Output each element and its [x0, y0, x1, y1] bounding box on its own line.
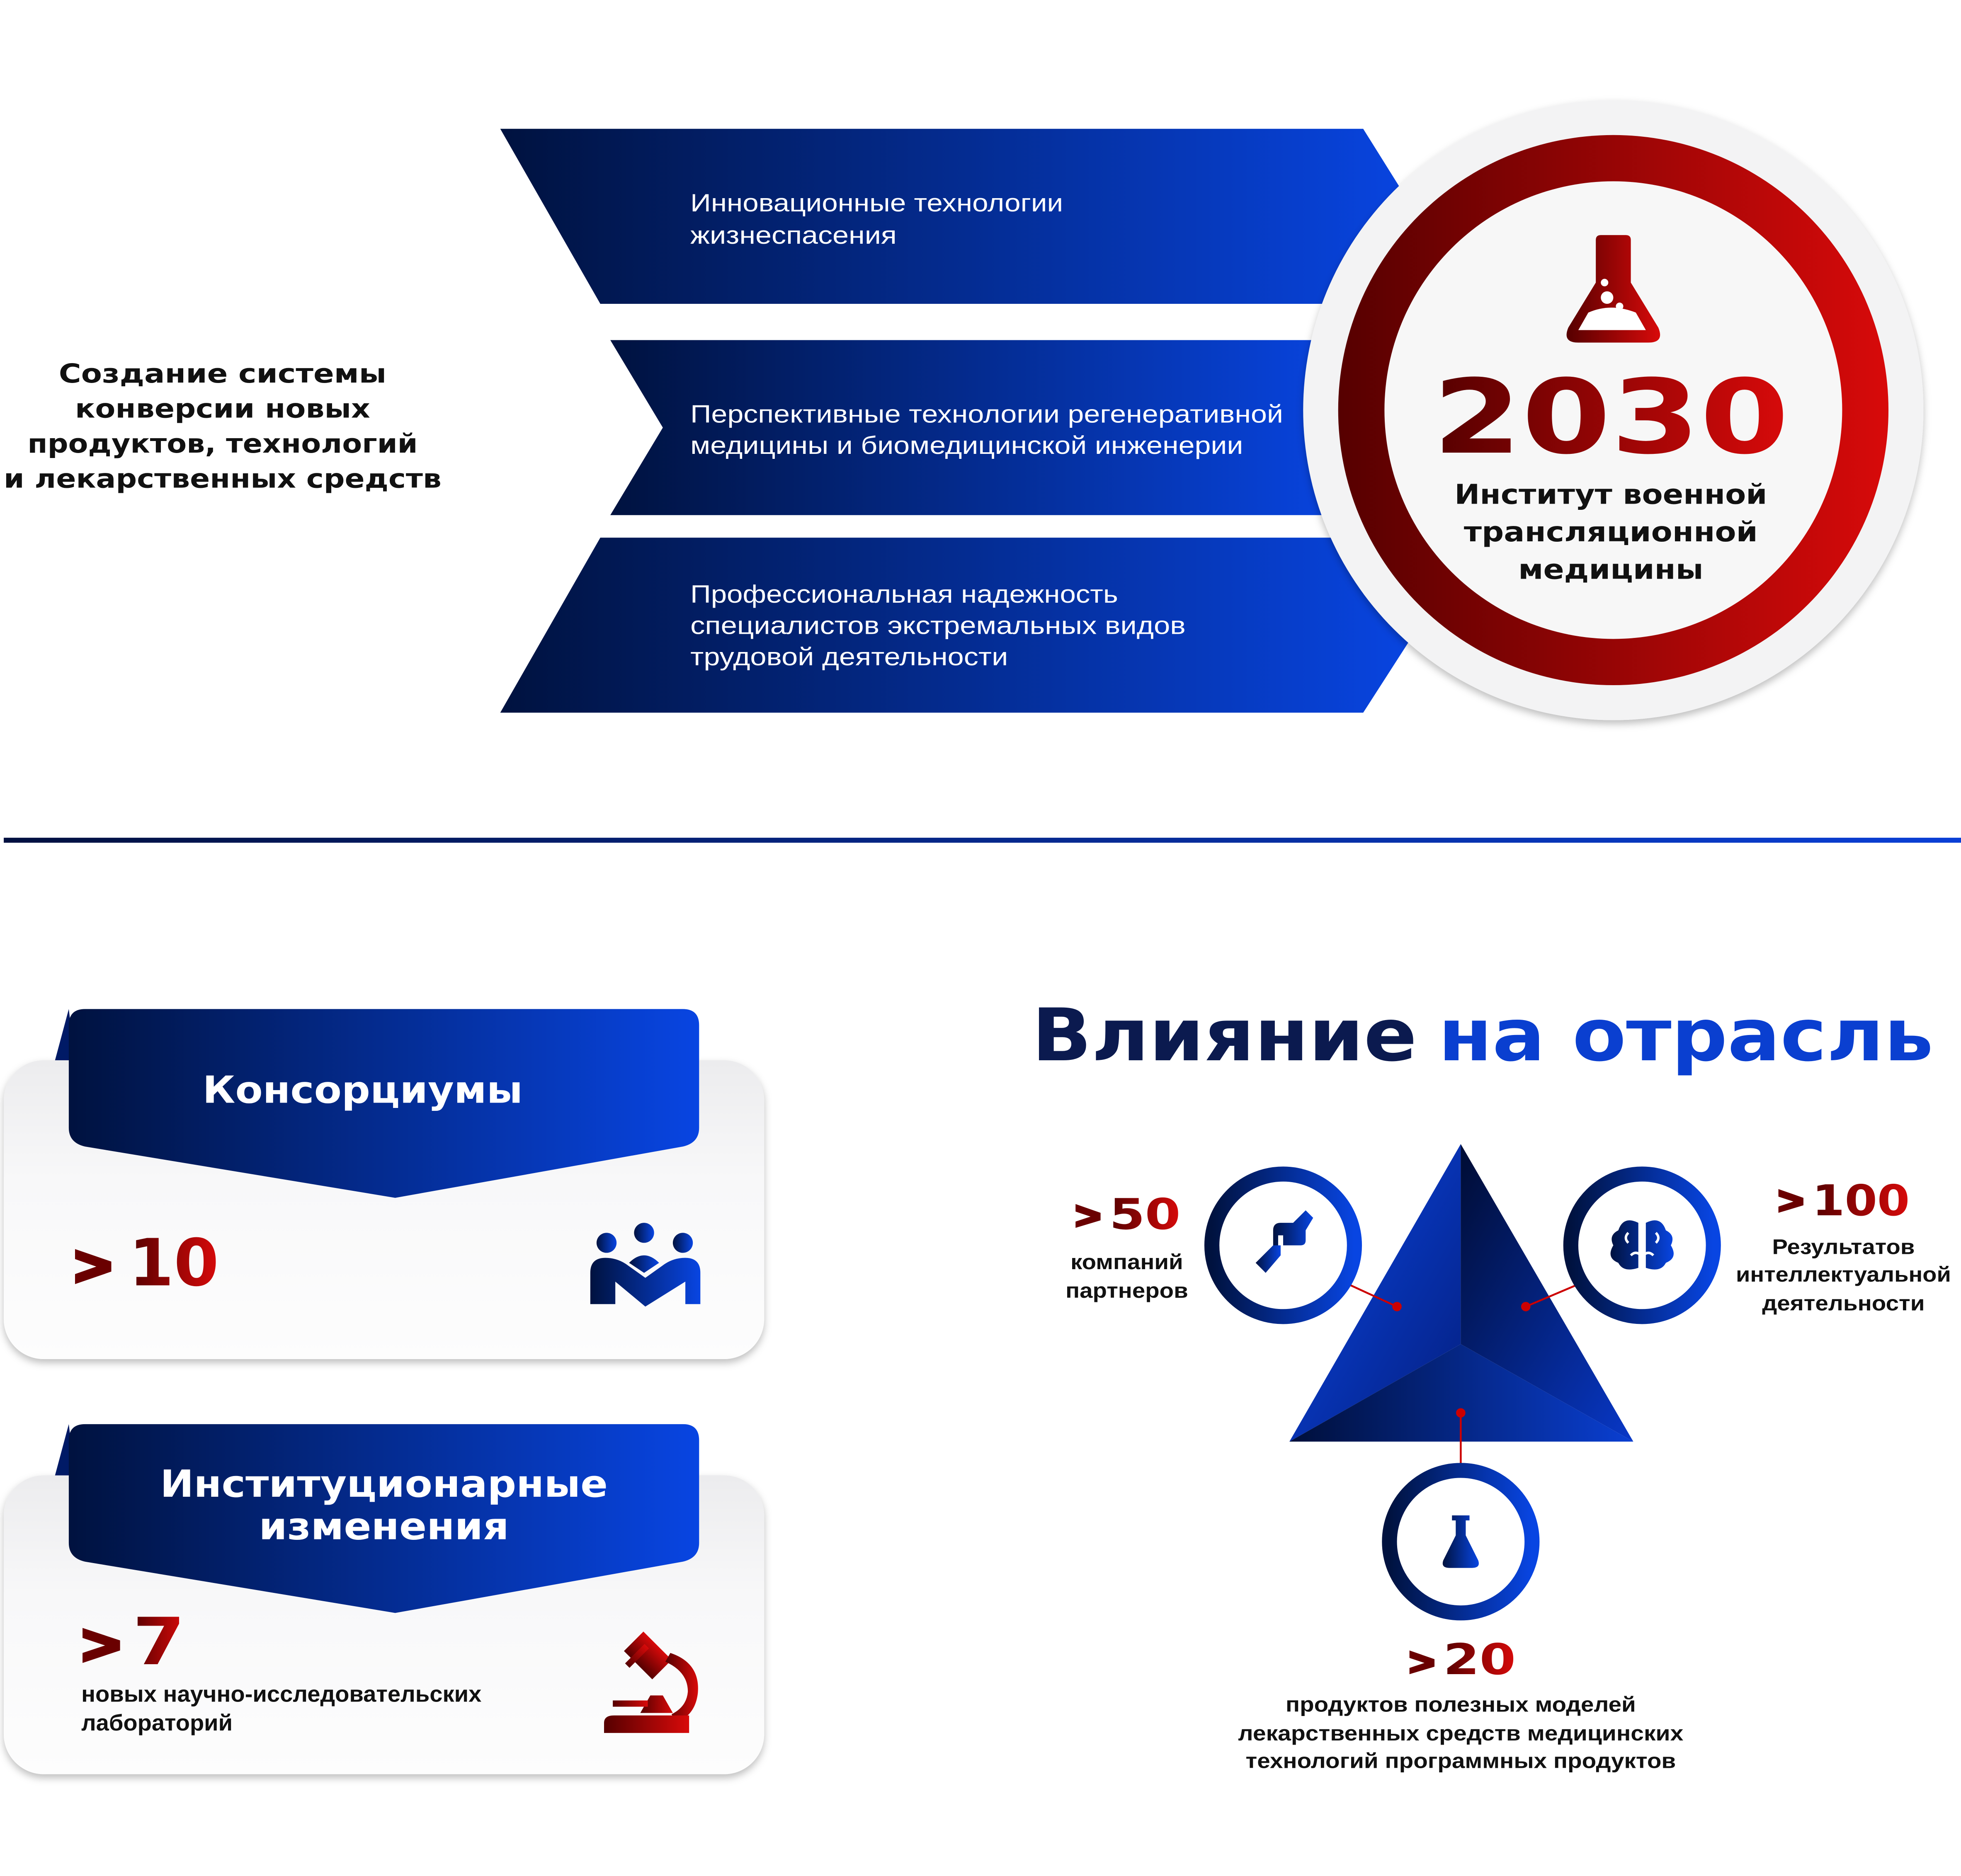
icon: microscope	[604, 1631, 698, 1733]
stat: >10: 10	[129, 1225, 219, 1301]
title: industry impact	[1032, 994, 1934, 1078]
connectors	[1351, 1285, 1576, 1465]
stat: 50 partners: партнеров	[1065, 1279, 1188, 1302]
stat: 20 products	[1238, 1635, 1684, 1772]
stat: 20 products: 20	[1443, 1635, 1516, 1685]
stat: 50 partners	[1065, 1190, 1188, 1302]
stat: 100 results: Результатов	[1772, 1235, 1915, 1259]
stat: >7: 7	[133, 1604, 185, 1680]
stat: 100 results	[1736, 1176, 1951, 1315]
title: industry impact: Влияние	[1032, 994, 1417, 1078]
stat: 20 products: продуктов полезных моделей	[1286, 1693, 1636, 1716]
stat: >10	[75, 1225, 219, 1301]
left text: conversion system: конверсии новых	[75, 393, 370, 424]
triangle chart	[1289, 1144, 1633, 1442]
arrow 1: innovative technologies: Инновационные технологии	[690, 189, 1063, 217]
arrow 3: professional reliability	[500, 538, 1420, 713]
card: consortiums: Консорциумы	[203, 1069, 523, 1112]
card: institutional changes	[4, 1424, 764, 1774]
title: industry impact: на отрасль	[1438, 994, 1934, 1078]
arrow 2: regenerative medicine	[610, 340, 1351, 515]
stat: 20 products: лекарственных средств медицинских	[1238, 1721, 1684, 1745]
circle: 2030 institute: медицины	[1518, 553, 1704, 586]
left text: conversion system	[4, 358, 442, 494]
arrow 1: innovative technologies	[500, 129, 1420, 304]
circle: 2030 institute: Институт военной	[1454, 478, 1767, 511]
card: consortiums	[4, 1009, 764, 1359]
stat: >7	[83, 1604, 185, 1680]
card: institutional changes: лабораторий	[81, 1710, 233, 1735]
left text: conversion system: Создание системы	[59, 358, 386, 389]
icon circle: flask	[1389, 1470, 1532, 1613]
stat: 100 results: 100	[1812, 1176, 1910, 1226]
icon: people	[590, 1223, 700, 1306]
circle: 2030 institute: трансляционной	[1464, 516, 1758, 548]
arrow 2: regenerative medicine: Перспективные технологии регенеративной	[690, 400, 1283, 428]
arrow 3: professional reliability: трудовой деятельности	[690, 642, 1008, 671]
card: institutional changes: изменения	[259, 1505, 509, 1548]
card: institutional changes: Институционарные	[160, 1462, 608, 1506]
icon circle: handshake	[1212, 1174, 1354, 1316]
circle: 2030 institute: 2030	[1432, 358, 1789, 477]
icon: flask	[1567, 235, 1660, 343]
arrow 2: regenerative medicine: медицины и биомедицинской инженерии	[690, 431, 1243, 459]
icon circle: brain	[1571, 1174, 1713, 1316]
circle: 2030 institute	[1303, 100, 1924, 720]
stat: 50 partners: компаний	[1070, 1250, 1183, 1274]
stat: 50 partners: 50	[1109, 1190, 1181, 1239]
stat: 20 products: технологий программных продуктов	[1246, 1749, 1676, 1772]
left text: conversion system: и лекарственных средств	[4, 463, 442, 494]
stat: 100 results: деятельности	[1762, 1291, 1925, 1315]
arrow 3: professional reliability: Профессиональная надежность	[690, 580, 1118, 608]
arrow 1: innovative technologies: жизнеспасения	[690, 221, 897, 249]
arrow 3: professional reliability: специалистов экстремальных видов	[690, 611, 1186, 639]
left text: conversion system: продуктов, технологий	[27, 428, 418, 459]
card: institutional changes: новых научно-исследовательских	[81, 1681, 481, 1706]
stat: 100 results: интеллектуальной	[1736, 1263, 1951, 1286]
